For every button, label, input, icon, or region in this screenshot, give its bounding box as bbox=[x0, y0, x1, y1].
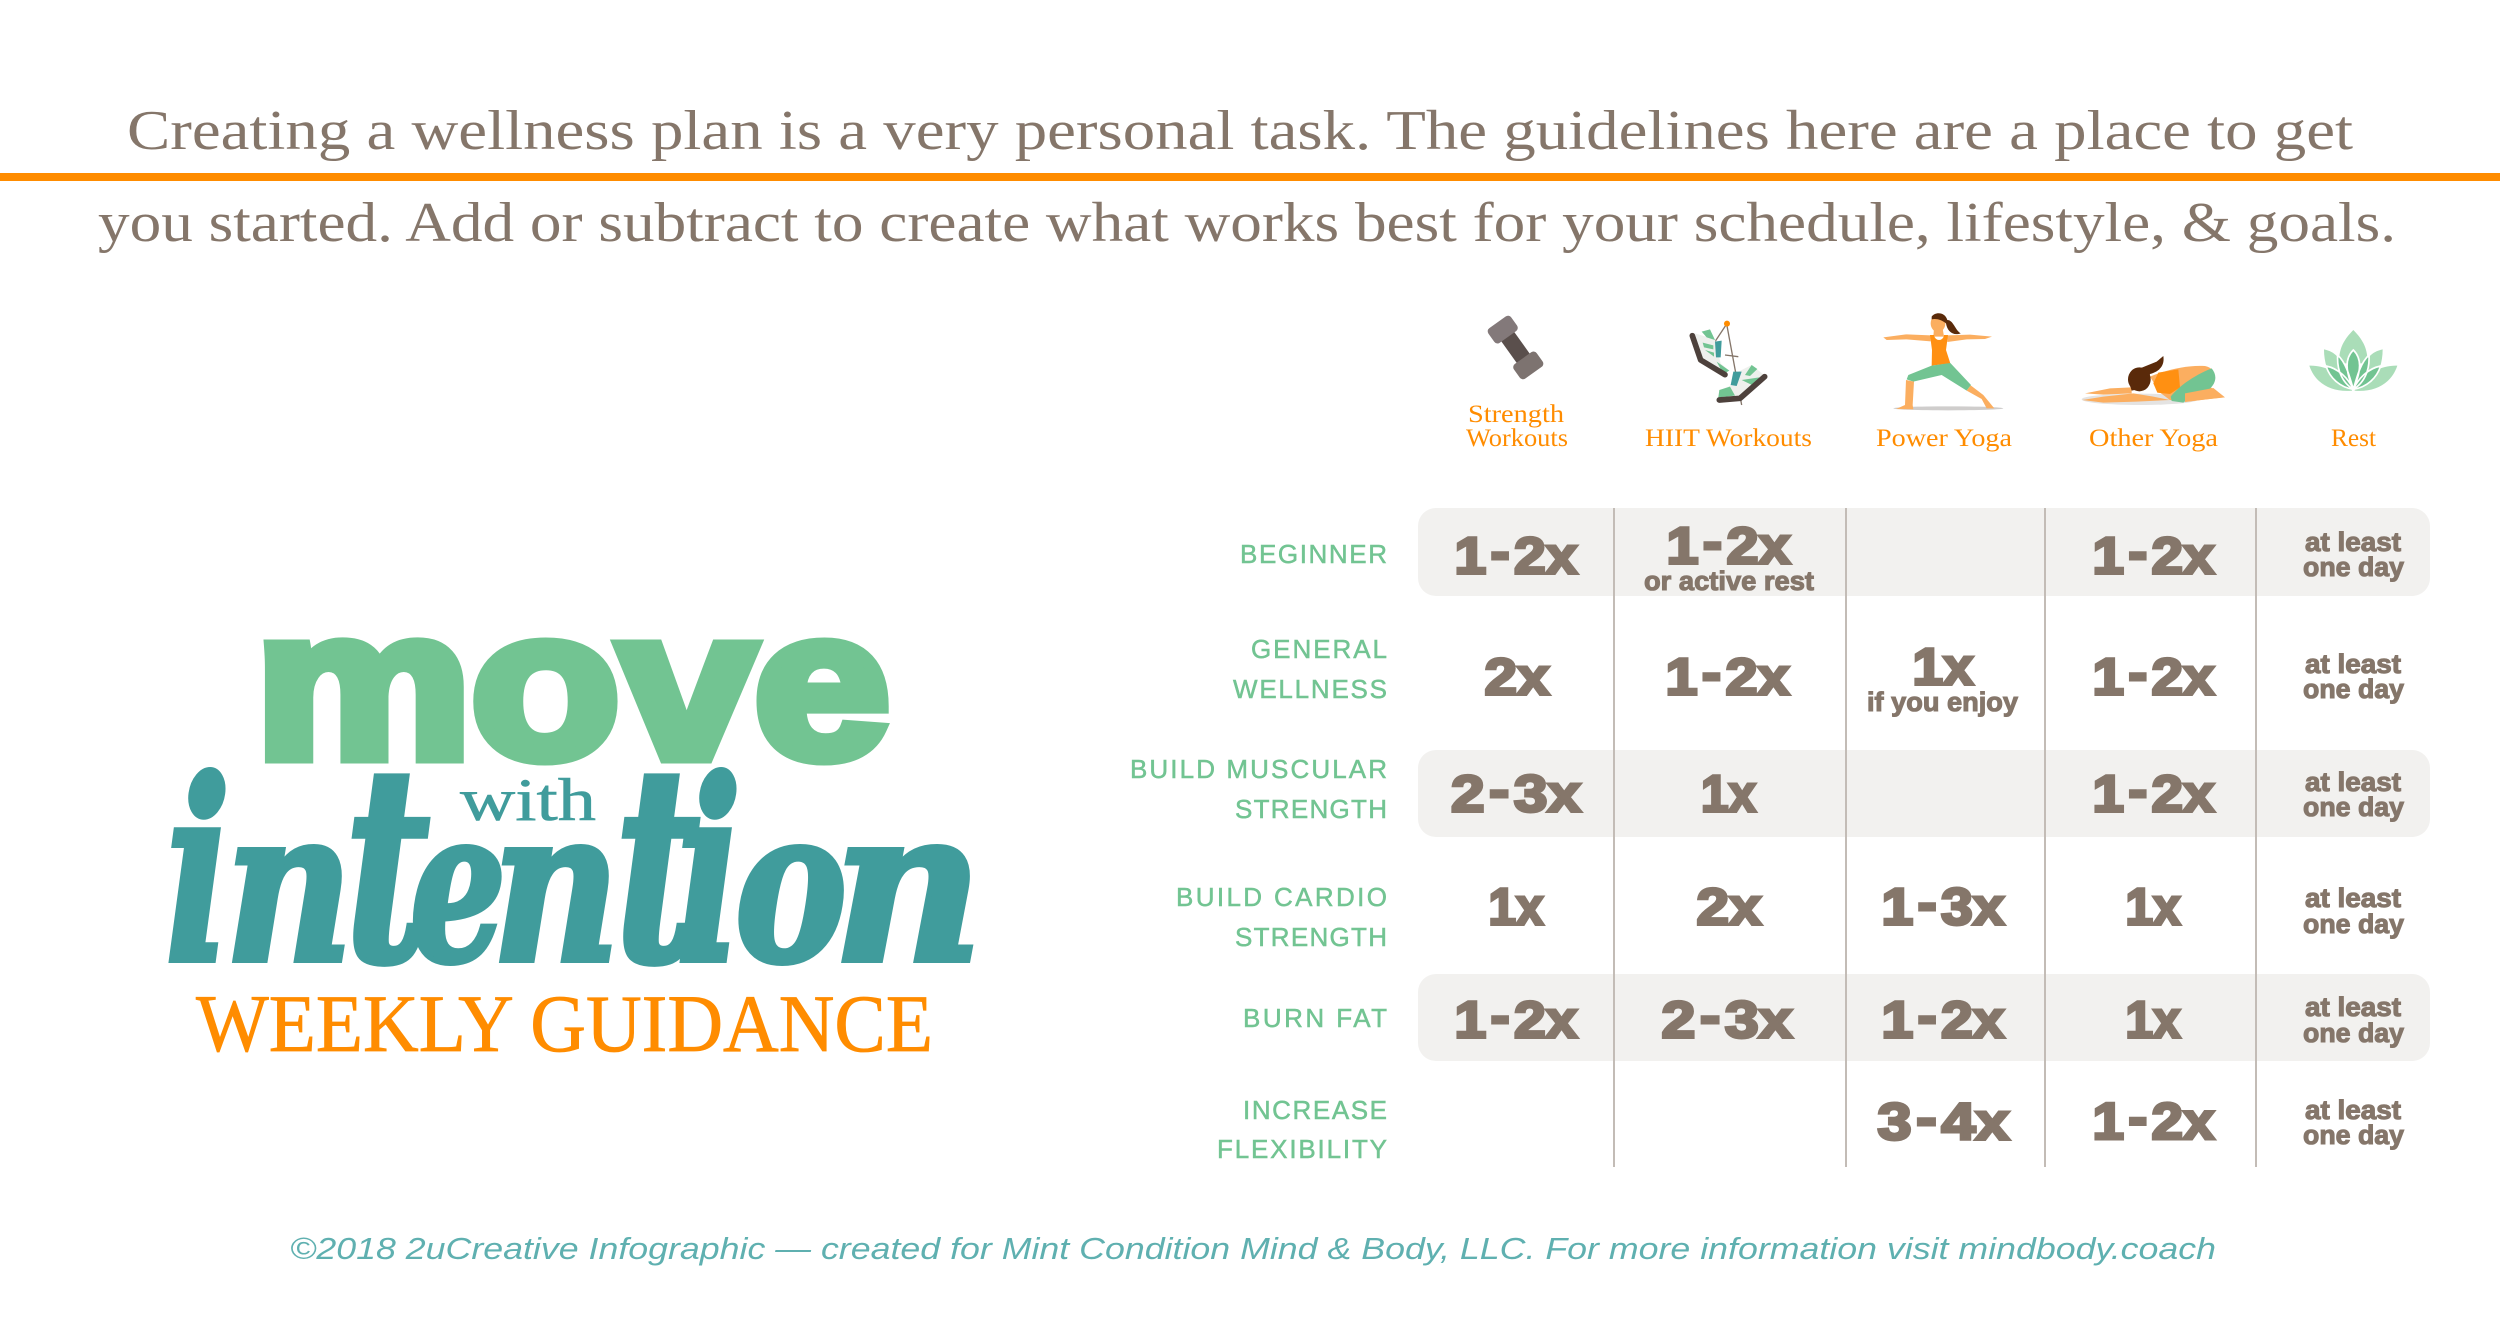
column headers: Other Yoga bbox=[2089, 425, 2218, 452]
intro text with orange rule bbox=[0, 100, 2500, 254]
title word: intention: n bbox=[492, 761, 620, 1010]
row: build cardio strength values: 2x bbox=[1696, 878, 1762, 936]
icon: lotus bbox=[2309, 330, 2397, 391]
row: beginner values: 2x bbox=[1727, 518, 1791, 576]
row: build muscular strength values: - bbox=[1489, 762, 1509, 820]
row: burn fat values: at least bbox=[2305, 992, 2401, 1022]
row labels: STRENGTH bbox=[1235, 922, 1387, 952]
row: build muscular strength values: 2 bbox=[1451, 766, 1480, 824]
row: burn fat values: 1 bbox=[1454, 992, 1483, 1050]
intro text with orange rule: Creating a wellness plan is a very personal task. The guidelines here are a place to get bbox=[127, 100, 2354, 162]
row: build muscular strength values: - bbox=[2128, 762, 2147, 820]
row: build cardio strength values: - bbox=[1918, 874, 1937, 932]
title word: with: with bbox=[460, 767, 596, 833]
row: build muscular strength values: at least bbox=[2305, 767, 2401, 797]
row: increase flexibility values: 4x bbox=[1941, 1094, 2010, 1152]
row: burn fat values: - bbox=[1700, 988, 1720, 1046]
title word: move: move bbox=[256, 567, 890, 802]
row: burn fat values: - bbox=[1491, 988, 1510, 1046]
row: beginner values: or active rest bbox=[1644, 566, 1814, 596]
icon: dumbbell bbox=[1486, 314, 1545, 381]
column headers bbox=[1466, 401, 2376, 452]
row: build cardio strength values: at least bbox=[2305, 883, 2401, 913]
icon: hanging sneakers bbox=[1692, 321, 1765, 405]
row: build muscular strength values: 3x bbox=[1514, 766, 1581, 824]
subtitle: weekly guidance: WEEKLY GUIDANCE bbox=[196, 978, 933, 1069]
row labels: WELLNESS bbox=[1233, 674, 1387, 704]
column headers: Rest bbox=[2331, 425, 2376, 452]
row: increase flexibility values: 2x bbox=[2152, 1093, 2215, 1151]
row: general wellness values: - bbox=[2128, 644, 2147, 702]
row: general wellness values: at least bbox=[2305, 649, 2401, 679]
row: burn fat values: one day bbox=[2303, 1018, 2404, 1048]
row: build cardio strength values: 1x bbox=[2126, 878, 2181, 936]
icon: child's pose figure bbox=[2082, 356, 2225, 405]
table column dividers bbox=[1614, 508, 2256, 1167]
column headers: Power Yoga bbox=[1876, 425, 2012, 452]
title lockup bbox=[165, 567, 983, 1069]
row: increase flexibility values: at least bbox=[2305, 1095, 2401, 1125]
row: general wellness values: 1x bbox=[1912, 638, 1974, 696]
column headers: Strength bbox=[1468, 401, 1565, 428]
row: burn fat values: 1x bbox=[2126, 992, 2181, 1050]
intro text with orange rule: you started. Add or subtract to create what works best for your schedule, lifestyle, & goals. bbox=[98, 192, 2396, 254]
row: burn fat values: - bbox=[1918, 988, 1937, 1046]
title word: intention: t bbox=[345, 706, 430, 1024]
row: build muscular strength values: 1x bbox=[1701, 766, 1756, 824]
title word: intention: n bbox=[225, 761, 353, 1010]
title word: intention: i bbox=[165, 725, 231, 1019]
row: increase flexibility values: 1 bbox=[2092, 1093, 2121, 1151]
column headers: Workouts bbox=[1466, 425, 1568, 452]
row labels: BUILD CARDIO bbox=[1176, 882, 1387, 912]
row: build muscular strength values: 2x bbox=[2152, 766, 2215, 824]
row: general wellness values: 1 bbox=[1666, 648, 1694, 706]
row: build muscular strength values bbox=[1451, 762, 2404, 824]
row labels: BUILD MUSCULAR bbox=[1130, 754, 1387, 784]
title word: intention: i bbox=[676, 725, 742, 1019]
row: build muscular strength values: 1 bbox=[2092, 766, 2121, 824]
row: beginner values: 2x bbox=[1514, 528, 1578, 586]
row: increase flexibility values: 3 bbox=[1878, 1094, 1906, 1152]
row: burn fat values: 2x bbox=[1941, 992, 2005, 1050]
row labels: STRENGTH bbox=[1235, 794, 1387, 824]
row: build cardio strength values: 1x bbox=[1488, 878, 1544, 936]
row labels: GENERAL bbox=[1251, 634, 1387, 664]
row: beginner values: one day bbox=[2303, 552, 2404, 582]
row labels bbox=[1130, 539, 1387, 1164]
row: general wellness values bbox=[1484, 638, 2404, 717]
row labels: INCREASE bbox=[1243, 1095, 1387, 1125]
row: burn fat values: 3x bbox=[1725, 992, 1793, 1050]
row: beginner values: - bbox=[1491, 524, 1510, 582]
column headers: HIIT Workouts bbox=[1645, 425, 1812, 452]
row: burn fat values bbox=[1454, 988, 2404, 1050]
table background bands bbox=[1418, 508, 2430, 1061]
row: build cardio strength values bbox=[1488, 874, 2404, 939]
row: build cardio strength values: 3x bbox=[1941, 878, 2005, 936]
title word: intention: t bbox=[615, 706, 700, 1024]
row: beginner values: 2x bbox=[2152, 528, 2215, 586]
row: increase flexibility values bbox=[1878, 1089, 2404, 1152]
row: build cardio strength values: one day bbox=[2303, 909, 2404, 939]
row labels: FLEXIBILITY bbox=[1217, 1134, 1387, 1164]
row: build cardio strength values: 1 bbox=[1882, 878, 1910, 936]
row labels: BEGINNER bbox=[1240, 539, 1387, 569]
row: burn fat values: 2 bbox=[1662, 992, 1690, 1050]
row: beginner values bbox=[1454, 514, 2404, 596]
row: beginner values: 1 bbox=[1666, 518, 1695, 576]
row: burn fat values: 1 bbox=[1882, 992, 1910, 1050]
row: general wellness values: one day bbox=[2303, 674, 2404, 704]
row: beginner values: - bbox=[2128, 524, 2147, 582]
row: increase flexibility values: one day bbox=[2303, 1120, 2404, 1150]
row: general wellness values: 2x bbox=[1726, 648, 1790, 706]
row labels: BURN FAT bbox=[1243, 1003, 1387, 1033]
row: general wellness values: 2x bbox=[1484, 648, 1550, 706]
footer credit: ©2018 2uCreative Infographic — created for Mint Condition Mind & Body, LLC. For more information visit mindbody.coach bbox=[290, 1231, 2216, 1266]
title word: intention: e bbox=[410, 761, 506, 1010]
title word: intention: o bbox=[735, 761, 847, 1010]
row: general wellness values: - bbox=[1702, 644, 1721, 702]
row: beginner values: 1 bbox=[1454, 528, 1483, 586]
row: beginner values: at least bbox=[2305, 527, 2401, 557]
icon: warrior pose figure bbox=[1883, 313, 2003, 410]
row: general wellness values: 2x bbox=[2152, 648, 2215, 706]
title word: intention: n bbox=[833, 761, 983, 1010]
row: increase flexibility values: - bbox=[1916, 1090, 1937, 1148]
row: general wellness values: if you enjoy bbox=[1867, 687, 2018, 717]
row: general wellness values: 1 bbox=[2092, 648, 2121, 706]
row: build muscular strength values: one day bbox=[2303, 792, 2404, 822]
row: beginner values: 1 bbox=[2092, 528, 2121, 586]
row: increase flexibility values: - bbox=[2128, 1089, 2147, 1147]
row: burn fat values: 2x bbox=[1514, 992, 1578, 1050]
row: beginner values: - bbox=[1703, 514, 1722, 572]
